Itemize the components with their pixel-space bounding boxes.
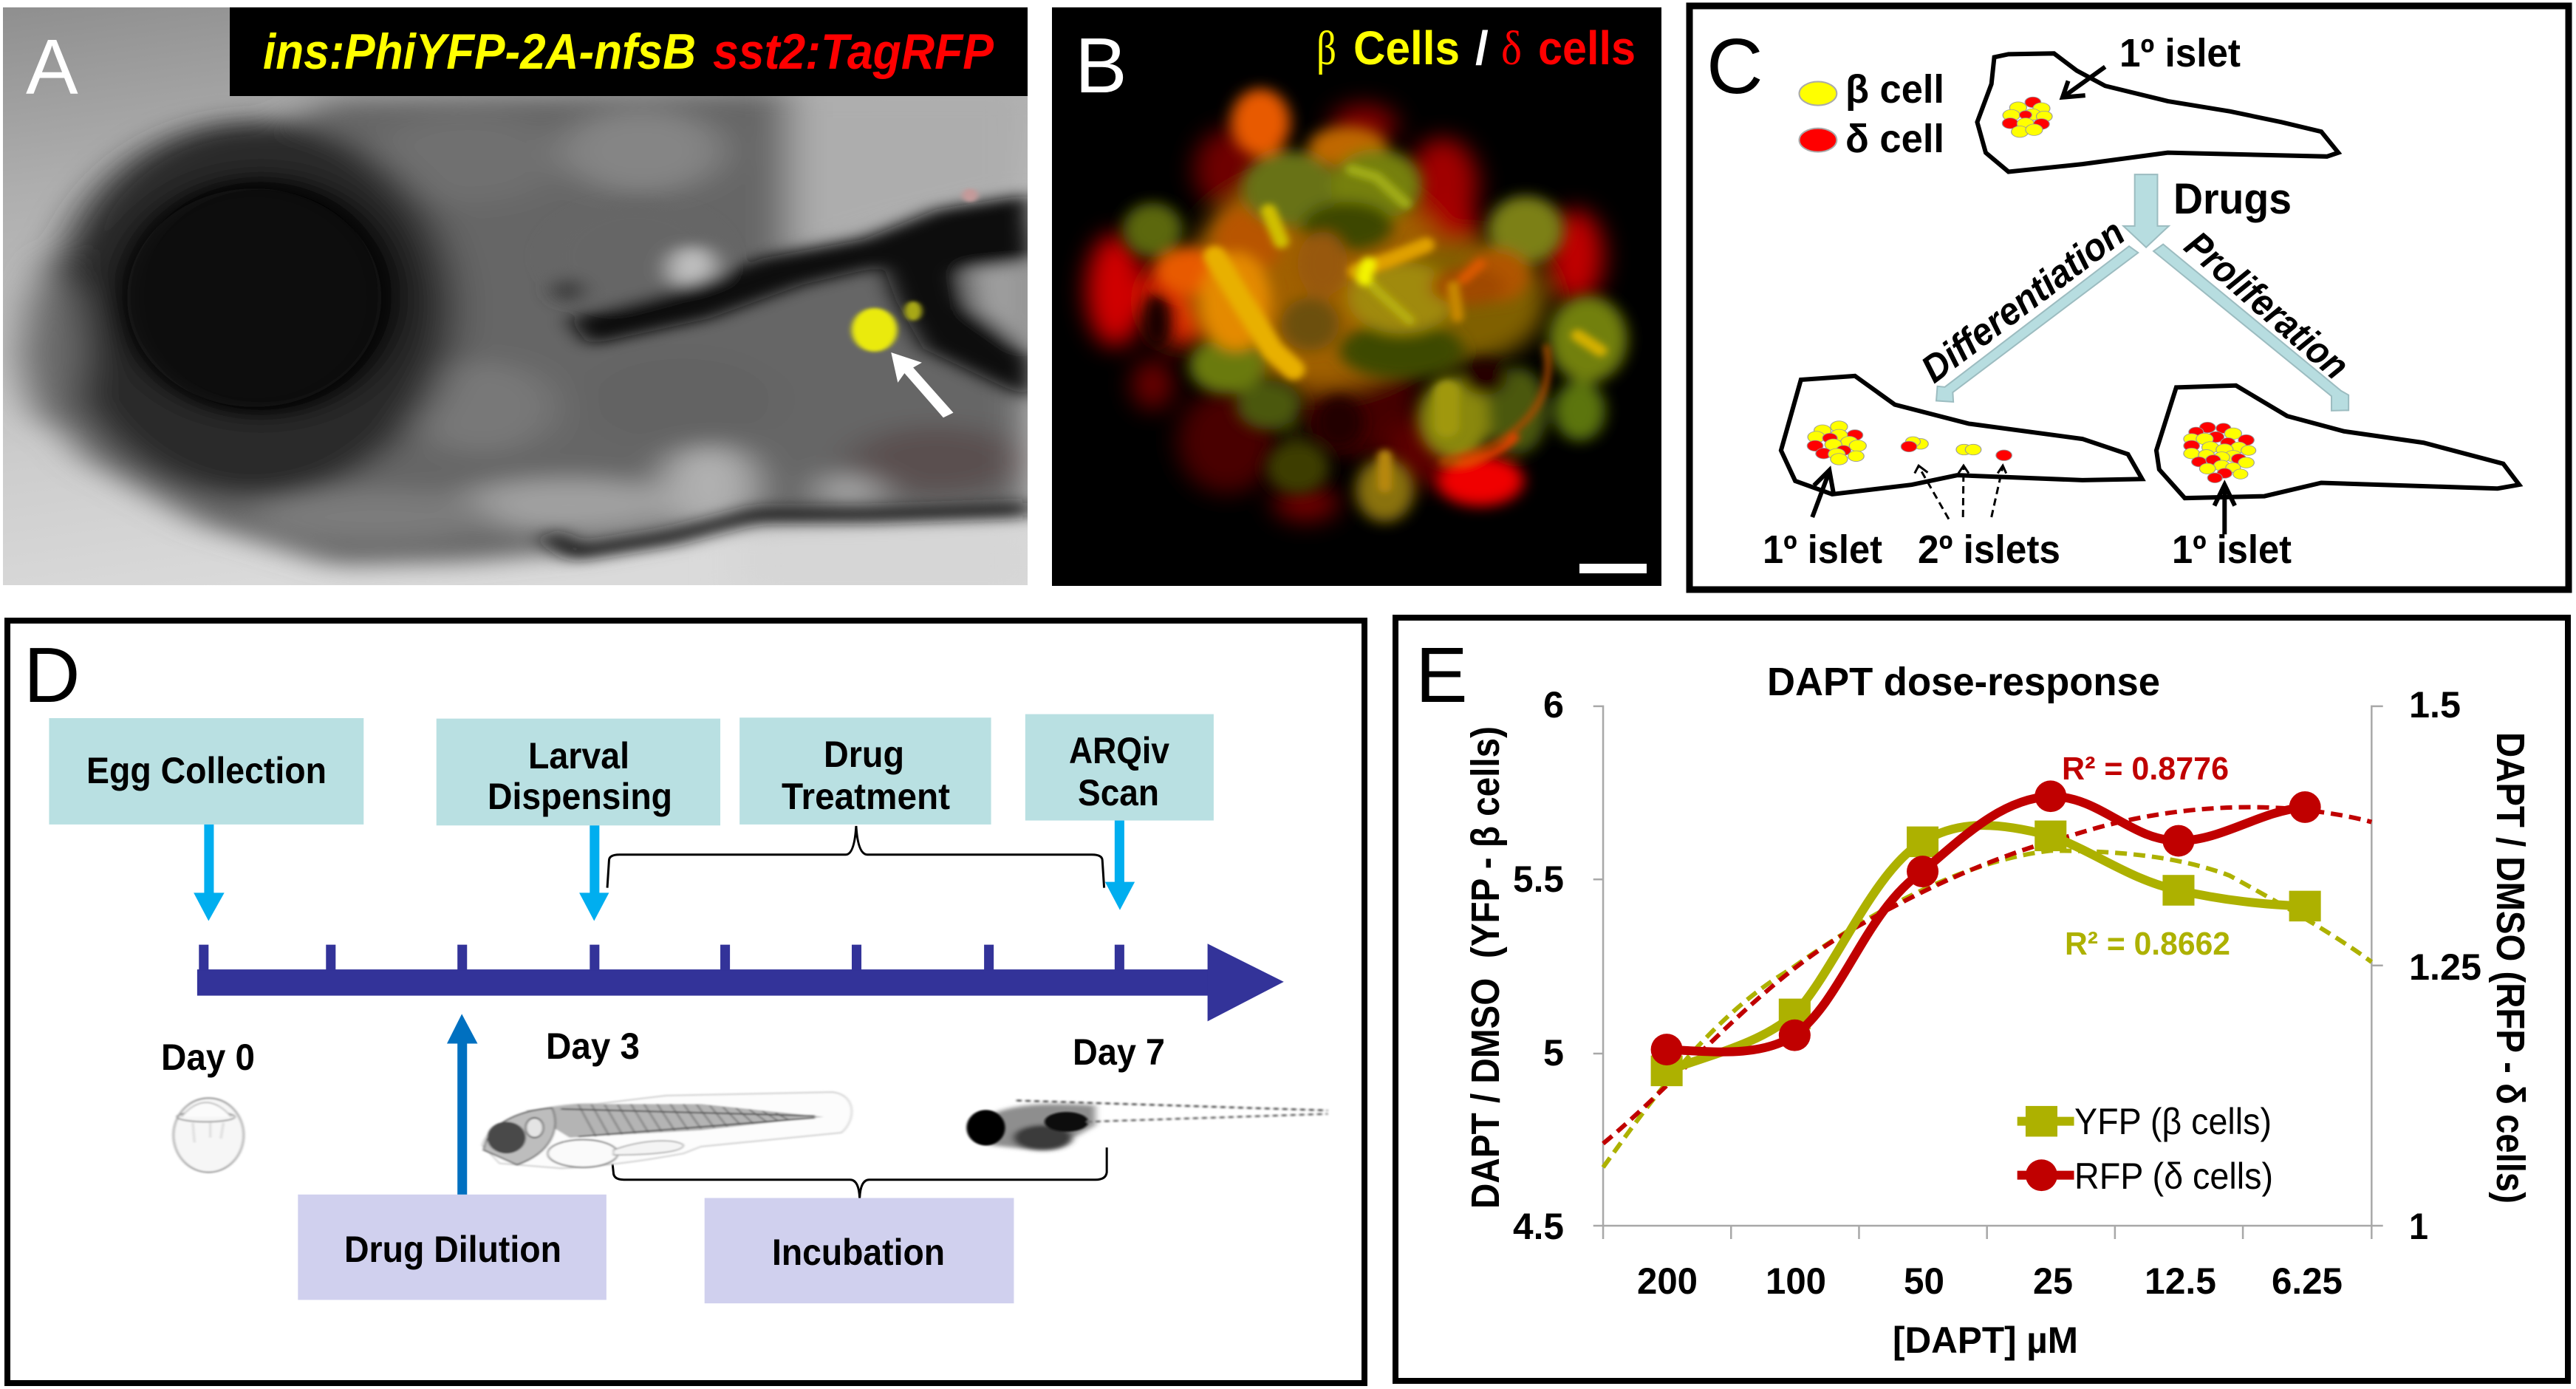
box text: Drug Treatment: Drug [824,734,904,775]
panel letter D: D [24,632,81,719]
label Day 0: Day 0 [161,1037,255,1078]
arrow to lower left primary islet [1812,470,1834,517]
big arrow: proliferation [2153,245,2348,411]
panel letter E: E [1415,632,1468,719]
bracket incubation [611,1147,1107,1198]
panel letter C: C [1706,23,1763,110]
RFP trendline dashed [1603,808,2371,1144]
label drugs: Drugs [2173,175,2292,223]
box text: Drug Treatment [782,734,950,817]
big arrow: drugs [2123,174,2169,248]
dark blue arrow up [447,1014,477,1195]
x axis tick labels: 100 [1766,1260,1826,1302]
step boxes bottom [298,1195,1014,1303]
YFP trendline dashed [1603,850,2371,1167]
pancreas top [1977,53,2338,171]
legend label beta cell: β cell [1845,67,1944,112]
bracket drug treatment [607,826,1104,888]
right axis tick labels: 1 [2409,1206,2428,1247]
arrow to lower right islet [2214,485,2235,534]
left axis tick labels: 4.5 [1513,1206,1564,1247]
label bar with transgene names: ins:PhiYFP-2A-nfsB [263,24,696,80]
box text: Larval Dispensing: Larval [528,735,629,777]
legend label delta cell: δ cell [1845,117,1944,161]
islet cluster top [2002,97,2052,137]
timeline shapes [49,714,1328,1303]
x axis tick labels [1637,1260,2343,1302]
label Day 3: Day 3 [546,1025,640,1067]
x axis tick labels: 50 [1904,1260,1944,1302]
box text: Larval Dispensing: Dispensing [488,776,672,817]
x axis tick labels: 200 [1637,1260,1698,1302]
label proliferation: Proliferation [2176,223,2357,388]
chart title: DAPT dose-response [1767,660,2160,704]
label bar with transgene names: sst2:TagRFP [713,24,994,80]
panel C: schematic of drug effects on islets [1690,6,2569,590]
secondary islets [1901,437,2012,461]
x axis tick labels: 12.5 [2145,1260,2216,1302]
right axis tick labels: 1.25 [2409,946,2481,988]
label secondary islets: 2º islets [1918,528,2060,572]
islet cluster lower right [2184,422,2256,482]
cell type legend text [1319,30,1634,75]
panel A: microscope image of zebrafish larva head [3,7,1037,592]
left axis tick labels [1513,684,1564,1247]
pancreas lower left [1781,376,2142,494]
larva head photograph [20,90,1037,592]
x axis tick labels: 6.25 [2272,1260,2343,1302]
left axis tick labels: 5 [1543,1032,1564,1074]
icon: larva day 7 [966,1101,1328,1150]
panel letter B: B [1075,22,1127,109]
white arrow pointing at islet [891,352,953,417]
big arrow: differentiation [1936,246,2138,402]
left axis tick labels: 5.5 [1513,859,1564,900]
R squared olive: R² = 0.8662 [2065,926,2230,962]
icon: embryo day 0 [174,1098,244,1173]
line chart [1593,706,2383,1239]
label bar with transgene names [230,7,1028,96]
panel E: DAPT dose-response chart [1395,618,2568,1381]
pancreas lower right [2156,386,2519,498]
label lower right primary islet: 1º islet [2172,528,2292,572]
legend text YFP: YFP (β cells) [2074,1101,2272,1142]
cell type legend text: β [1316,21,1336,75]
label lower left primary islet: 1º islet [1763,528,1882,572]
left y axis title: DAPT / DMSO (YFP - β cells) [1463,726,1508,1209]
R squared red: R² = 0.8776 [2062,751,2229,787]
x axis title: [DAPT] µM [1893,1320,2078,1361]
label: top primary islet: 1º islet [2119,31,2241,75]
box text: Drug Dilution: Drug Dilution [344,1229,561,1270]
cell type legend text: Cells [1353,21,1460,75]
left axis tick labels: 6 [1543,684,1564,726]
arrow to top islet [2063,66,2105,98]
cell type legend text: δ [1501,21,1522,75]
box text: Egg Collection: Egg Collection [86,750,327,791]
scale bar [1579,564,1647,573]
fluorescent islet cells [1087,89,1627,522]
cell type legend text: cells [1538,21,1636,75]
legend markers [2018,1106,2074,1191]
box text: ARQiv Scan [1069,730,1169,813]
step boxes top [49,714,1214,825]
right axis tick labels [2409,684,2481,1247]
cell type legend text: / [1475,21,1489,75]
timeline axis arrow [197,943,1284,1021]
box text: Larval Dispensing [488,735,672,817]
x axis tick labels: 25 [2033,1260,2073,1302]
panel D: experimental timeline [7,621,1364,1383]
schematic shapes [1781,53,2519,534]
box text: Drug Treatment: Treatment [782,776,950,817]
icon: larva day 3 [482,1092,852,1168]
right axis tick labels: 1.5 [2409,684,2461,726]
YFP series [1651,821,2321,1086]
islet cluster lower left [1807,421,1866,465]
light blue arrows down [194,821,1135,921]
panel letter A: A [26,24,78,111]
legend cells [1799,82,1837,152]
RFP series [1651,780,2321,1065]
label Day 7: Day 7 [1073,1031,1165,1073]
panel B: confocal image of islet [1052,7,1661,586]
label differentiation: Differentiation [1913,211,2133,392]
right y axis title: DAPT / DMSO (RFP - δ cells) [2488,732,2532,1204]
legend text RFP: RFP (δ cells) [2074,1156,2273,1197]
dashed arrows to secondary islets [1915,465,2006,519]
axes [1593,706,2383,1239]
box text: Incubation: Incubation [772,1232,945,1273]
box text: ARQiv Scan: Scan [1078,772,1159,813]
bright cell membranes [1214,170,1600,486]
box text: ARQiv Scan: ARQiv [1069,730,1169,771]
fluorescent islet spot [852,188,978,352]
